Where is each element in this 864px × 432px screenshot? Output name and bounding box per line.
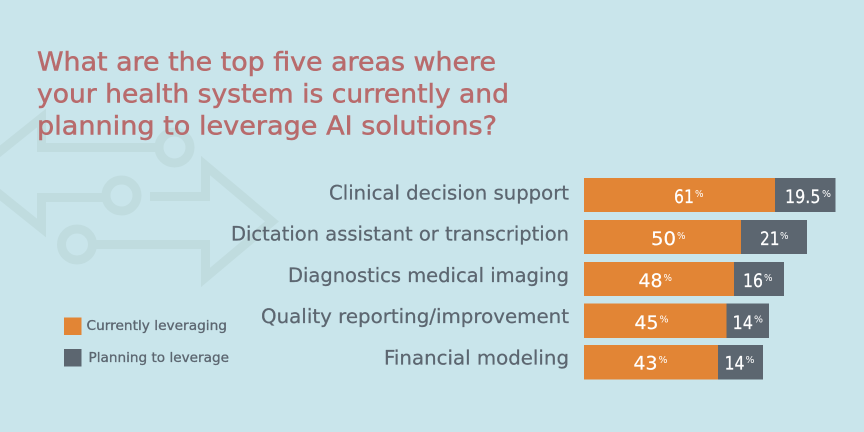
legend item: planning to leverage: Planning to leverage bbox=[88, 351, 229, 366]
bar: Clinical decision support: % bbox=[822, 189, 831, 200]
bar: Dictation assistant or transcription: 50 bbox=[651, 228, 676, 250]
bar: Quality reporting/improvement: 14 bbox=[732, 312, 753, 334]
bar: Financial modeling: 43 bbox=[634, 352, 658, 374]
bar: Clinical decision support: 61 bbox=[674, 186, 694, 208]
bar: Financial modeling: 14 bbox=[724, 352, 744, 374]
title: your health system is currently and bbox=[37, 80, 509, 110]
category labels: Quality reporting/improvement bbox=[261, 305, 569, 328]
bar: Quality reporting/improvement: % bbox=[660, 314, 668, 326]
icon: background circuit arrows bbox=[0, 118, 272, 278]
bar: Dictation assistant or transcription bbox=[584, 220, 807, 254]
bar: Diagnostics medical imaging: % bbox=[664, 273, 672, 284]
category labels: Clinical decision support bbox=[329, 182, 569, 204]
bar: Clinical decision support bbox=[584, 178, 836, 212]
bar: Quality reporting/improvement bbox=[584, 304, 769, 338]
bar: Quality reporting/improvement: % bbox=[754, 314, 763, 326]
legend item: planning to leverage bbox=[64, 349, 229, 366]
category labels: Dictation assistant or transcription bbox=[231, 222, 569, 246]
bar: Clinical decision support: % bbox=[695, 189, 704, 200]
bar: Diagnostics medical imaging bbox=[584, 262, 784, 296]
category labels: Financial modeling bbox=[384, 346, 569, 370]
category labels: Diagnostics medical imaging bbox=[288, 264, 569, 287]
title: What are the top five areas where bbox=[37, 48, 496, 78]
bar: Diagnostics medical imaging: 16 bbox=[743, 270, 763, 292]
stacked bar chart bbox=[584, 178, 836, 380]
legend bbox=[64, 318, 229, 366]
title: planning to leverage AI solutions? bbox=[37, 112, 497, 142]
bar: Financial modeling: % bbox=[658, 355, 668, 366]
category labels bbox=[231, 182, 569, 370]
bar: Clinical decision support: 19.5 bbox=[785, 186, 820, 208]
bar: Dictation assistant or transcription: % bbox=[677, 231, 686, 242]
bar: Diagnostics medical imaging: 48 bbox=[638, 270, 662, 292]
bar: Quality reporting/improvement: 45 bbox=[634, 312, 658, 334]
bar: Financial modeling bbox=[584, 345, 763, 380]
bar: Dictation assistant or transcription: 21 bbox=[760, 228, 780, 250]
bar: Financial modeling: % bbox=[746, 355, 754, 366]
bar: Dictation assistant or transcription: % bbox=[780, 231, 788, 242]
legend item: currently leveraging: Currently leveraging bbox=[86, 319, 227, 334]
bar: Diagnostics medical imaging: % bbox=[764, 273, 772, 284]
title bbox=[37, 48, 509, 142]
